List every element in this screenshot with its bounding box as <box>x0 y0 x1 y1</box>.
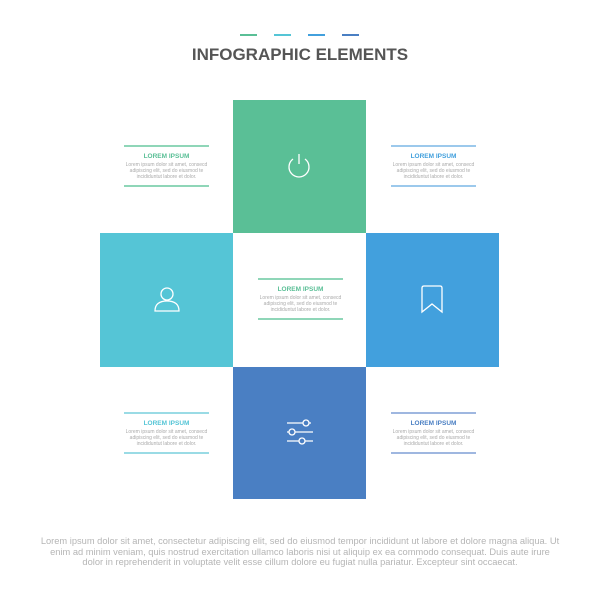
panel: top green <box>233 100 366 233</box>
icon: bookmark <box>421 285 443 314</box>
panel: left cyan <box>100 233 233 367</box>
header dashes <box>240 34 359 36</box>
text block: top-right: Lorem ipsum dolor sit amet, consecd adipiscing elit, sed do eiusmod te incididuntut labore et dolor. <box>393 162 474 180</box>
text block: top-left: LOREM IPSUM <box>144 153 189 160</box>
icon: sliders <box>287 419 313 445</box>
title: INFOGRAPHIC ELEMENTS <box>192 45 408 64</box>
text block: top-right <box>391 145 476 187</box>
text block: bottom-right: Lorem ipsum dolor sit amet, consecd adipiscing elit, sed do eiusmod te incididuntut labore et dolor. <box>393 429 474 447</box>
panel: right blue <box>366 233 499 367</box>
text block: bottom-left <box>124 412 209 454</box>
text block: center: LOREM IPSUM <box>278 286 323 293</box>
text block: top-right: LOREM IPSUM <box>411 153 456 160</box>
text block: bottom-left: Lorem ipsum dolor sit amet, consecd adipiscing elit, sed do eiusmod te incididuntut labore et dolor. <box>126 429 207 447</box>
icon: user <box>154 287 180 312</box>
footer text: enim ad minim veniam, quis nostrud exercitation ullamco laboris nisi ut aliquip ex ea commodo consequat. Duis aute irure <box>50 546 550 556</box>
footer text: Lorem ipsum dolor sit amet, consectetur adipiscing elit, sed do eiusmod tempor incididunt ut labore et dolore magna aliqua. Ut <box>41 536 559 546</box>
panel: bottom dark blue <box>233 367 366 499</box>
footer text: dolor in reprehenderit in voluptate velit esse cillum dolore eu fugiat nulla pariatur. Excepteur sint occaecat. <box>82 557 518 567</box>
icon: power <box>288 154 310 178</box>
footer text <box>41 536 560 567</box>
text block: top-left <box>124 145 209 187</box>
text block: center: Lorem ipsum dolor sit amet, consecd adipiscing elit, sed do eiusmod te incididuntut labore et dolor. <box>260 295 341 313</box>
text block: bottom-right: LOREM IPSUM <box>411 420 456 427</box>
text block: bottom-right <box>391 412 476 454</box>
text block: top-left: Lorem ipsum dolor sit amet, consecd adipiscing elit, sed do eiusmod te incididuntut labore et dolor. <box>126 162 207 180</box>
text block: bottom-left: LOREM IPSUM <box>144 420 189 427</box>
text block: center <box>258 278 343 320</box>
